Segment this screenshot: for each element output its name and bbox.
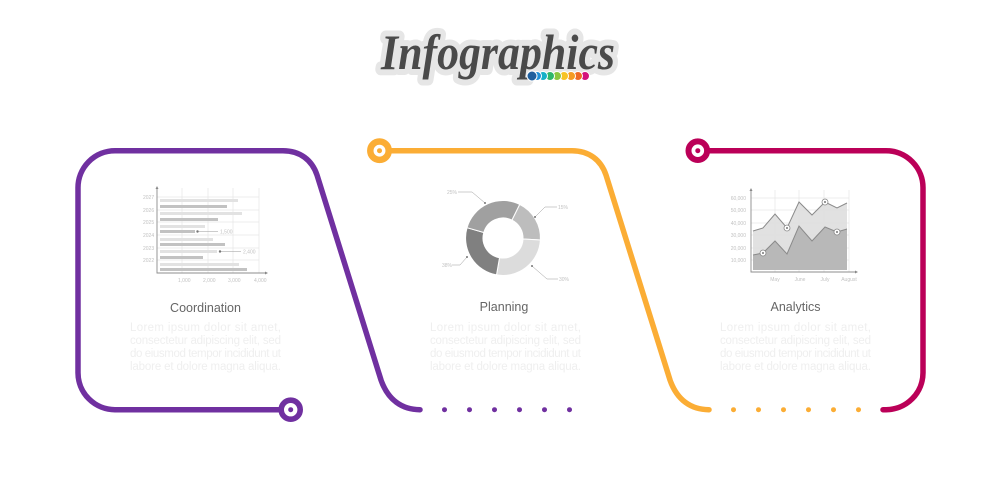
upper area: [753, 202, 847, 270]
orange start node: [370, 142, 389, 160]
month labels: May: [770, 277, 780, 283]
lower area: [753, 226, 847, 270]
value labels: 10,000: [731, 258, 746, 264]
donut labels: 30%: [559, 277, 570, 283]
value labels: 60,000: [731, 196, 746, 202]
value labels: [178, 278, 267, 284]
text block: Analytics: [720, 322, 872, 373]
month labels: July: [821, 277, 830, 283]
series lines: [753, 202, 847, 255]
callout 2,400: 2,400: [243, 250, 256, 256]
value labels: [731, 196, 746, 264]
value labels: 3,000: [228, 278, 241, 284]
title: [380, 24, 615, 81]
heading: Planning: Planning: [480, 300, 528, 314]
orange connector: [370, 142, 861, 412]
heading: Coordination: Coordination: [170, 301, 241, 315]
title colour dots: [527, 71, 590, 81]
text block: Coordination: consectetur adipiscing elit, sed: [130, 335, 281, 347]
text block: Analytics: labore et dolore magna aliqua.: [720, 361, 871, 373]
purple line: [78, 151, 420, 410]
text block: Planning: Lorem ipsum dolor sit amet,: [430, 322, 581, 334]
donut labels: [442, 190, 570, 283]
slice 15%: [512, 204, 540, 240]
donut labels: 25%: [447, 190, 458, 196]
purple dots: [442, 407, 572, 412]
value labels: 2,000: [203, 278, 216, 284]
heading: Analytics: Analytics: [770, 300, 821, 314]
text block: Planning: consectetur adipiscing elit, sed: [430, 335, 581, 347]
purple connector: [78, 151, 572, 419]
month labels: August: [841, 277, 857, 283]
value labels: 50,000: [731, 208, 746, 214]
crimson connector: [688, 141, 923, 410]
text block: Coordination: labore et dolore magna aliqua.: [130, 361, 281, 373]
year labels: 2022: [143, 258, 154, 264]
text block: Analytics: consectetur adipiscing elit, sed: [720, 335, 871, 347]
dark bars: [160, 205, 247, 271]
year labels: 2026: [143, 208, 154, 214]
purple end node: [281, 400, 300, 419]
value labels: 4,000: [254, 278, 267, 284]
text block: Coordination: Lorem ipsum dolor sit amet,: [130, 322, 281, 334]
text block: Coordination: [130, 322, 282, 373]
year labels: 2024: [143, 233, 154, 239]
year labels: [143, 195, 154, 264]
orange dots: [731, 407, 861, 412]
title word: Infographics: [380, 24, 615, 80]
value labels: 30,000: [731, 233, 746, 239]
year labels: 2023: [143, 246, 154, 252]
area chart: [731, 188, 858, 283]
month labels: June: [795, 277, 806, 283]
donut labels: 38%: [442, 263, 453, 269]
axes: [751, 190, 857, 272]
orange line: [388, 151, 709, 410]
text block: Coordination: do eiusmod tempor incididunt ut: [130, 348, 282, 360]
year labels: 2025: [143, 220, 154, 226]
donut labels: 15%: [558, 205, 569, 211]
light bars: [160, 199, 242, 266]
text block: Analytics: do eiusmod tempor incididunt ut: [720, 348, 872, 360]
crimson start node: [688, 141, 707, 160]
year labels: 2027: [143, 195, 154, 201]
leader lines: [452, 192, 558, 279]
bar chart: [143, 186, 268, 284]
text block: Planning: labore et dolore magna aliqua.: [430, 361, 581, 373]
crimson line: [707, 151, 923, 410]
axes: [157, 188, 267, 273]
text block: Planning: [430, 322, 582, 373]
month labels: [770, 277, 857, 283]
callout 1,500: 1,500: [220, 230, 233, 236]
text block: Planning: do eiusmod tempor incididunt ut: [430, 348, 582, 360]
slice 25%: [467, 201, 520, 232]
slice 38%: [466, 228, 500, 275]
slice 30%: [496, 239, 540, 275]
donut chart: [442, 190, 570, 283]
value labels: 40,000: [731, 221, 746, 227]
markers: [760, 199, 840, 256]
value labels: 1,000: [178, 278, 191, 284]
text block: Analytics: Lorem ipsum dolor sit amet,: [720, 322, 871, 334]
value labels: 20,000: [731, 246, 746, 252]
